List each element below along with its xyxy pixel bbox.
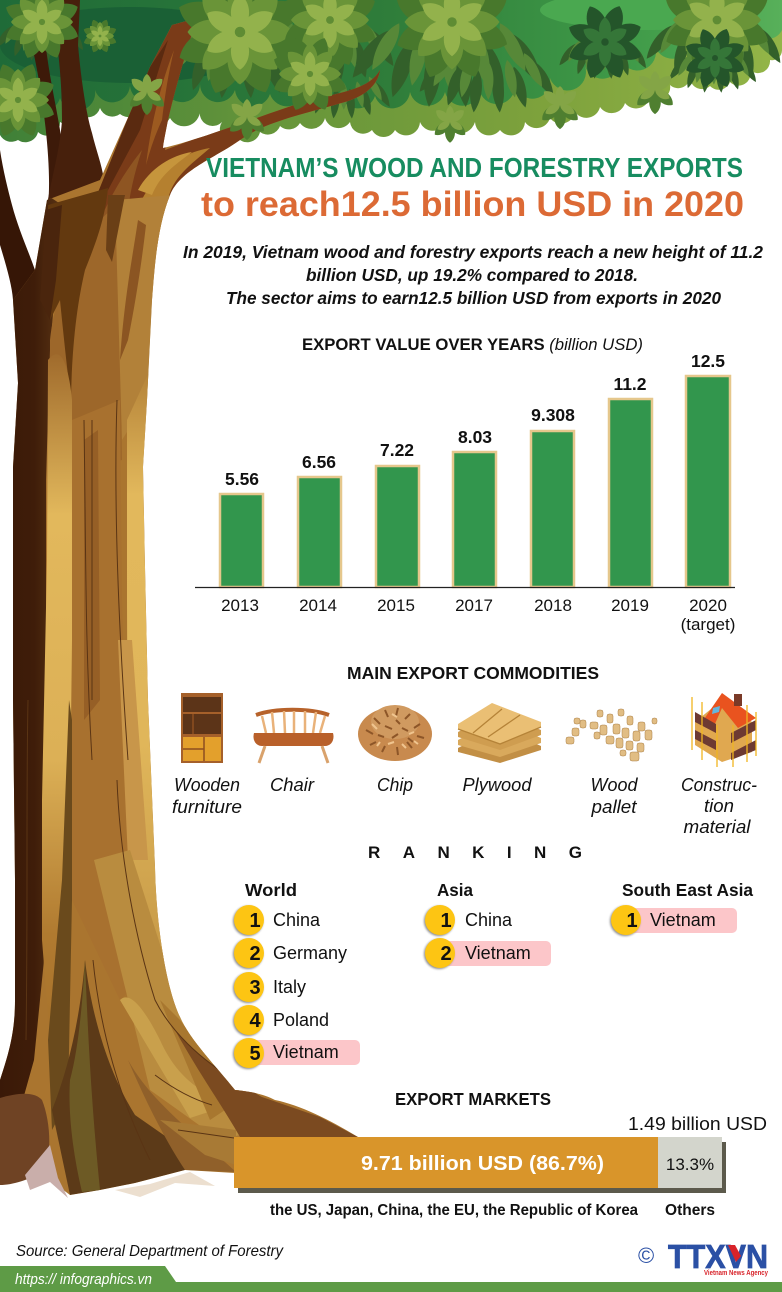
intro paragraph: The sector aims to earn12.5 billion USD from exports in 2020	[226, 288, 721, 308]
ranking: World: 3	[249, 977, 261, 999]
ranking: World: 2	[249, 943, 261, 965]
export markets: Others	[665, 1202, 715, 1219]
left far limb	[0, 150, 38, 320]
trunk body with bands	[0, 0, 400, 1200]
ranking: Asia: 1	[440, 910, 452, 932]
ranking: World: 5	[249, 1043, 261, 1065]
centre bands	[72, 400, 120, 474]
bark veins	[26, 400, 236, 1160]
logo: TTXVN: TTXVN	[668, 1238, 768, 1275]
intro paragraph: In 2019, Vietnam wood and forestry exports reach a new height of 11.2	[183, 242, 763, 262]
others value: 1.49 billion USD	[628, 1114, 767, 1134]
icon: wooden furniture	[181, 693, 223, 763]
market labels: the US, Japan, China, the EU, the Republic of Korea	[270, 1202, 638, 1219]
droop foliage	[0, 18, 782, 119]
leaf rosettes	[0, 0, 773, 143]
commodity labels: Wooden	[174, 775, 240, 795]
heading: ranking: RANKING	[368, 843, 582, 862]
icon: wood pellets	[566, 709, 657, 761]
chart heading: EXPORT VALUE OVER YEARS (billion USD)	[302, 335, 643, 354]
dark left band	[0, 195, 62, 1110]
commodity labels: furniture	[172, 797, 242, 817]
commodity labels: material	[684, 817, 752, 837]
dark left stem	[33, 48, 70, 205]
year axis labels: 2015	[377, 596, 415, 615]
tree canopy	[0, 0, 782, 142]
ranking: Asia: China	[465, 910, 513, 930]
icon: plywood stack	[458, 703, 541, 763]
ranking: Asia: Asia	[437, 880, 473, 900]
branch highlight	[103, 150, 142, 217]
ranking: World: Italy	[273, 977, 306, 997]
gold band right	[127, 370, 165, 960]
commodity labels: Chair	[270, 775, 315, 795]
ranking: South East Asia: 1	[626, 910, 638, 932]
icon: chair	[253, 710, 334, 763]
bar values: 5.56	[225, 469, 259, 489]
year axis labels: (target)	[681, 615, 735, 634]
stacked bar	[234, 1137, 726, 1193]
heading: EXPORT MARKETS	[395, 1089, 551, 1109]
icon: construction house	[692, 693, 756, 767]
icon: wood chip pile	[358, 705, 432, 761]
year axis labels: 2017	[455, 596, 493, 615]
bar values: 7.22	[380, 440, 414, 460]
source: Source: General Department of Forestry	[16, 1243, 284, 1260]
root dark folds	[175, 1030, 358, 1137]
ranking: World: 1	[249, 910, 261, 932]
ranking: World: China	[273, 910, 321, 930]
ranking: Asia: 2	[440, 943, 452, 965]
ranking: Asia: Vietnam	[465, 943, 531, 963]
branch	[95, 18, 380, 225]
intro paragraph: billion USD, up 19.2% compared to 2018.	[306, 265, 638, 285]
commodity labels: Construc-	[681, 775, 757, 795]
year axis labels	[221, 596, 735, 634]
ranking: World: Vietnam	[273, 1042, 339, 1062]
year axis labels: 2020	[689, 596, 727, 615]
ranking: World: World	[245, 880, 297, 900]
year axis labels: 2018	[534, 596, 572, 615]
export markets	[234, 1089, 767, 1219]
Vietnam highlight	[630, 908, 737, 933]
ranking: South East Asia	[611, 880, 753, 935]
tree trunk	[0, 0, 400, 1200]
bar values: 8.03	[458, 427, 492, 447]
logo: TTXVN	[638, 1238, 768, 1277]
gold band left	[42, 358, 72, 964]
bar values: 12.5	[691, 351, 725, 371]
root golden mass	[94, 850, 261, 1136]
dark olive strip	[48, 700, 72, 1130]
stacked bar: 13.3%	[666, 1155, 714, 1174]
footer bar	[0, 1266, 782, 1292]
stacked bar: 9.71 billion USD (86.7%)	[361, 1153, 604, 1175]
upper trunk streaks	[50, 214, 122, 460]
ranking: Asia	[425, 880, 551, 968]
commodity labels: Wood	[590, 775, 638, 795]
Vietnam highlight	[444, 941, 551, 966]
commodity labels: pallet	[590, 797, 638, 817]
bars	[220, 376, 730, 587]
bar values	[225, 351, 725, 489]
year axis labels: 2019	[611, 596, 649, 615]
ground shadow	[25, 1145, 68, 1198]
bar values: 11.2	[613, 374, 647, 394]
bar values: 9.308	[531, 405, 575, 425]
commodity labels: tion	[704, 796, 734, 816]
title	[201, 152, 744, 224]
commodity labels	[172, 775, 757, 837]
bar chart: export value	[195, 335, 735, 634]
title: to reach12.5 billion USD in 2020	[201, 185, 744, 224]
bar values: 6.56	[302, 452, 336, 472]
commodity labels: Plywood	[462, 775, 532, 795]
ranking: World: Germany	[273, 943, 347, 963]
ranking: World	[234, 880, 360, 1068]
ranking: World: 4	[249, 1010, 261, 1032]
logo: TTXVN: ©	[638, 1243, 654, 1268]
root left lump	[0, 1094, 49, 1185]
commodity labels: Chip	[377, 775, 413, 795]
ranking: South East Asia: South East Asia	[622, 880, 753, 900]
logo: TTXVN: Vietnam News Agency	[704, 1270, 768, 1277]
year axis labels: 2013	[221, 596, 259, 615]
year axis labels: 2014	[299, 596, 337, 615]
intro paragraph	[183, 242, 763, 308]
ranking: World: Poland	[273, 1010, 329, 1030]
Vietnam highlight	[252, 1040, 360, 1065]
ranking: South East Asia: Vietnam	[650, 910, 716, 930]
footer bar: https:// infographics.vn	[15, 1271, 152, 1288]
heading: main export commodities: MAIN EXPORT COMMODITIES	[347, 663, 599, 683]
